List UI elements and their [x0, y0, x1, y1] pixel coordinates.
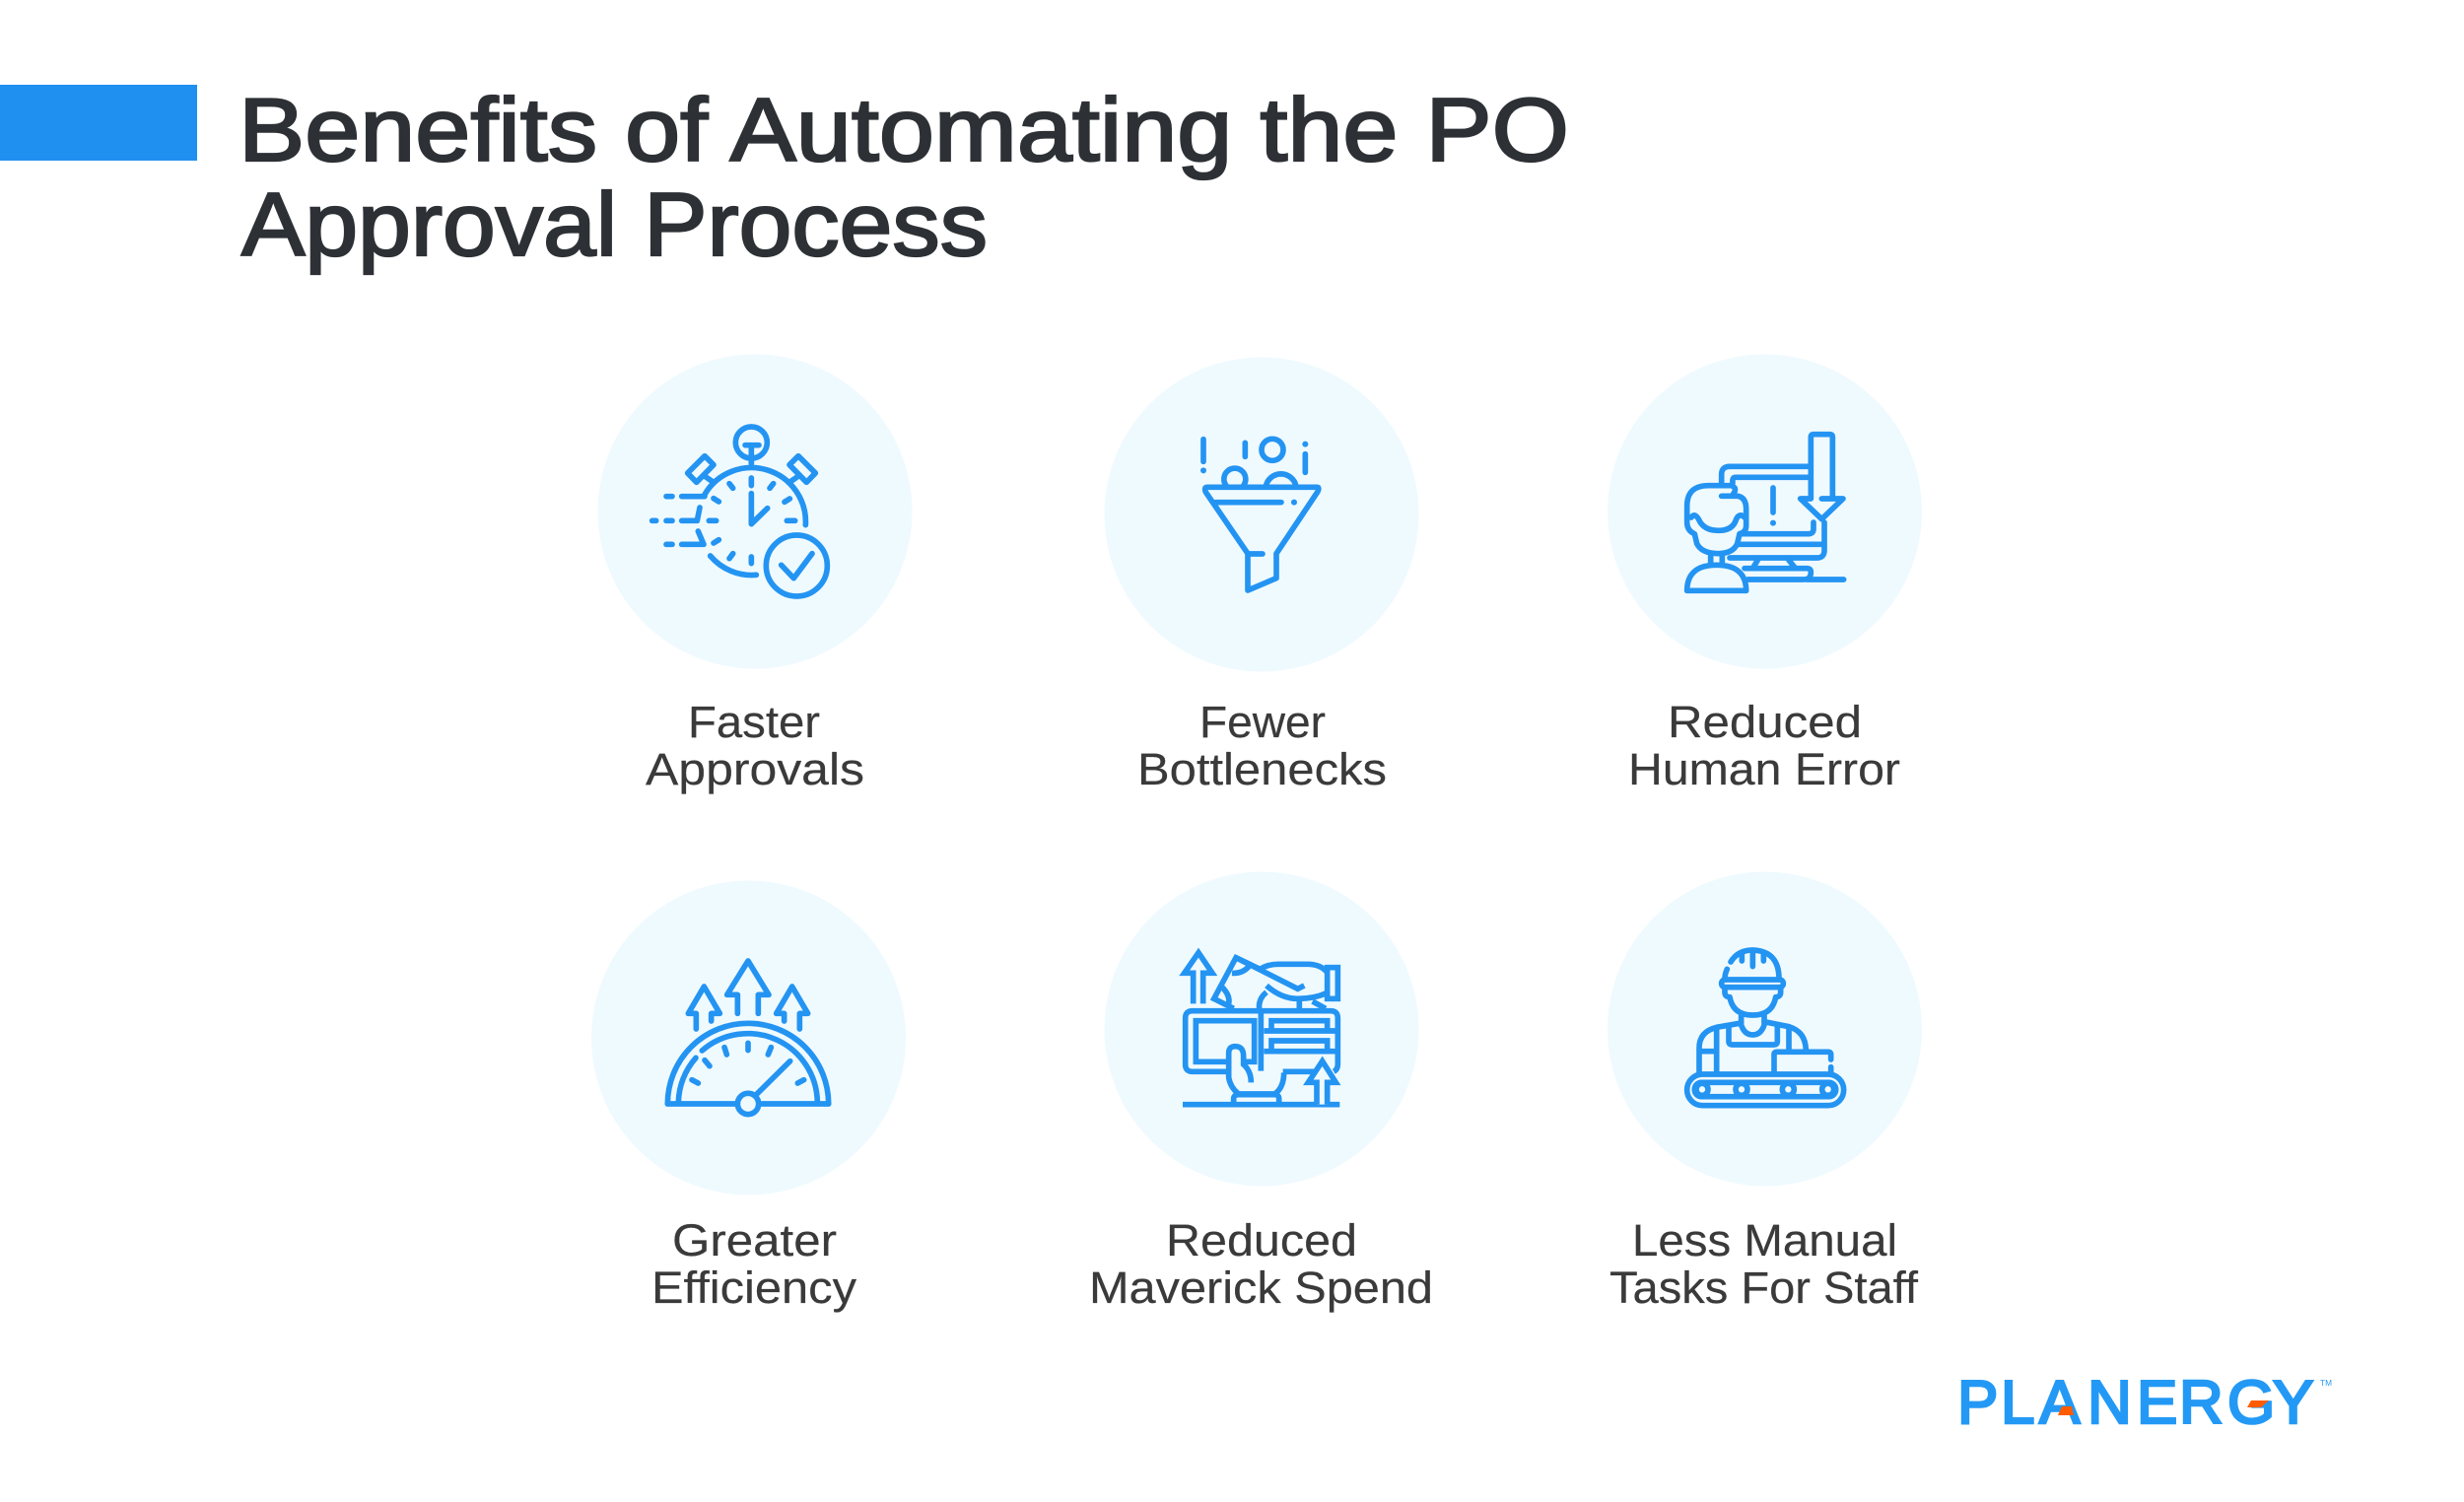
label: greater efficiency: [651, 1215, 857, 1313]
icon background circle: [1104, 357, 1419, 672]
icon: worker at conveyor: [1687, 950, 1844, 1106]
label: faster approvals: [646, 697, 864, 794]
icon: person at monitor with alert: [1687, 435, 1844, 590]
label: less manual tasks for staff: [1609, 1215, 1919, 1313]
icon: funnel: [1200, 439, 1319, 590]
icon: hand, monitor and arrows: [1183, 953, 1339, 1105]
logo: PLANERGY: PLANERGY: [1957, 1369, 2313, 1437]
panel: faster approvals: [597, 355, 913, 794]
label: reduced human error: Human Error: [1628, 744, 1900, 794]
label: reduced human error: Reduced: [1668, 697, 1862, 747]
title: Benefits of Automating the PO: [239, 81, 1569, 180]
label: reduced maverick spend: [1089, 1215, 1433, 1313]
icon: stopwatch with check: [652, 427, 827, 596]
icon background circle: [1104, 871, 1419, 1187]
icon: speedometer with arrows: [667, 961, 829, 1115]
title: [239, 81, 1569, 275]
panel: reduced human error: [1608, 355, 1922, 794]
icon background circle: [1608, 355, 1922, 668]
header accent bar: [0, 85, 197, 161]
label: reduced maverick spend: Reduced: [1166, 1215, 1357, 1265]
title: Approval Process: [241, 175, 988, 275]
label: greater efficiency: Greater: [672, 1215, 837, 1265]
label: greater efficiency: Efficiency: [651, 1263, 857, 1313]
icon background circle: [1608, 871, 1922, 1187]
label: less manual tasks for staff: Less Manual: [1632, 1215, 1897, 1265]
label: less manual tasks for staff: Tasks For Staff: [1609, 1263, 1919, 1313]
logo orange accent on G: [2247, 1400, 2269, 1407]
icon background circle: [591, 881, 906, 1195]
panel: less manual tasks for staff: [1608, 871, 1922, 1313]
label: fewer bottlenecks: Fewer: [1199, 697, 1326, 747]
label: fewer bottlenecks: [1137, 697, 1387, 794]
panel: reduced maverick spend: [1089, 871, 1433, 1313]
label: fewer bottlenecks: Bottlenecks: [1137, 744, 1387, 794]
label: faster approvals: Faster: [688, 697, 820, 747]
panel: fewer bottlenecks: [1104, 357, 1419, 794]
logo trademark: TM: [2320, 1379, 2332, 1388]
label: faster approvals: Approvals: [646, 744, 864, 794]
label: reduced human error: [1628, 697, 1900, 794]
logo orange accent on A: [2058, 1406, 2074, 1415]
panel: greater efficiency: [591, 881, 906, 1313]
icon background circle: [597, 355, 913, 668]
label: reduced maverick spend: Maverick Spend: [1089, 1263, 1433, 1313]
